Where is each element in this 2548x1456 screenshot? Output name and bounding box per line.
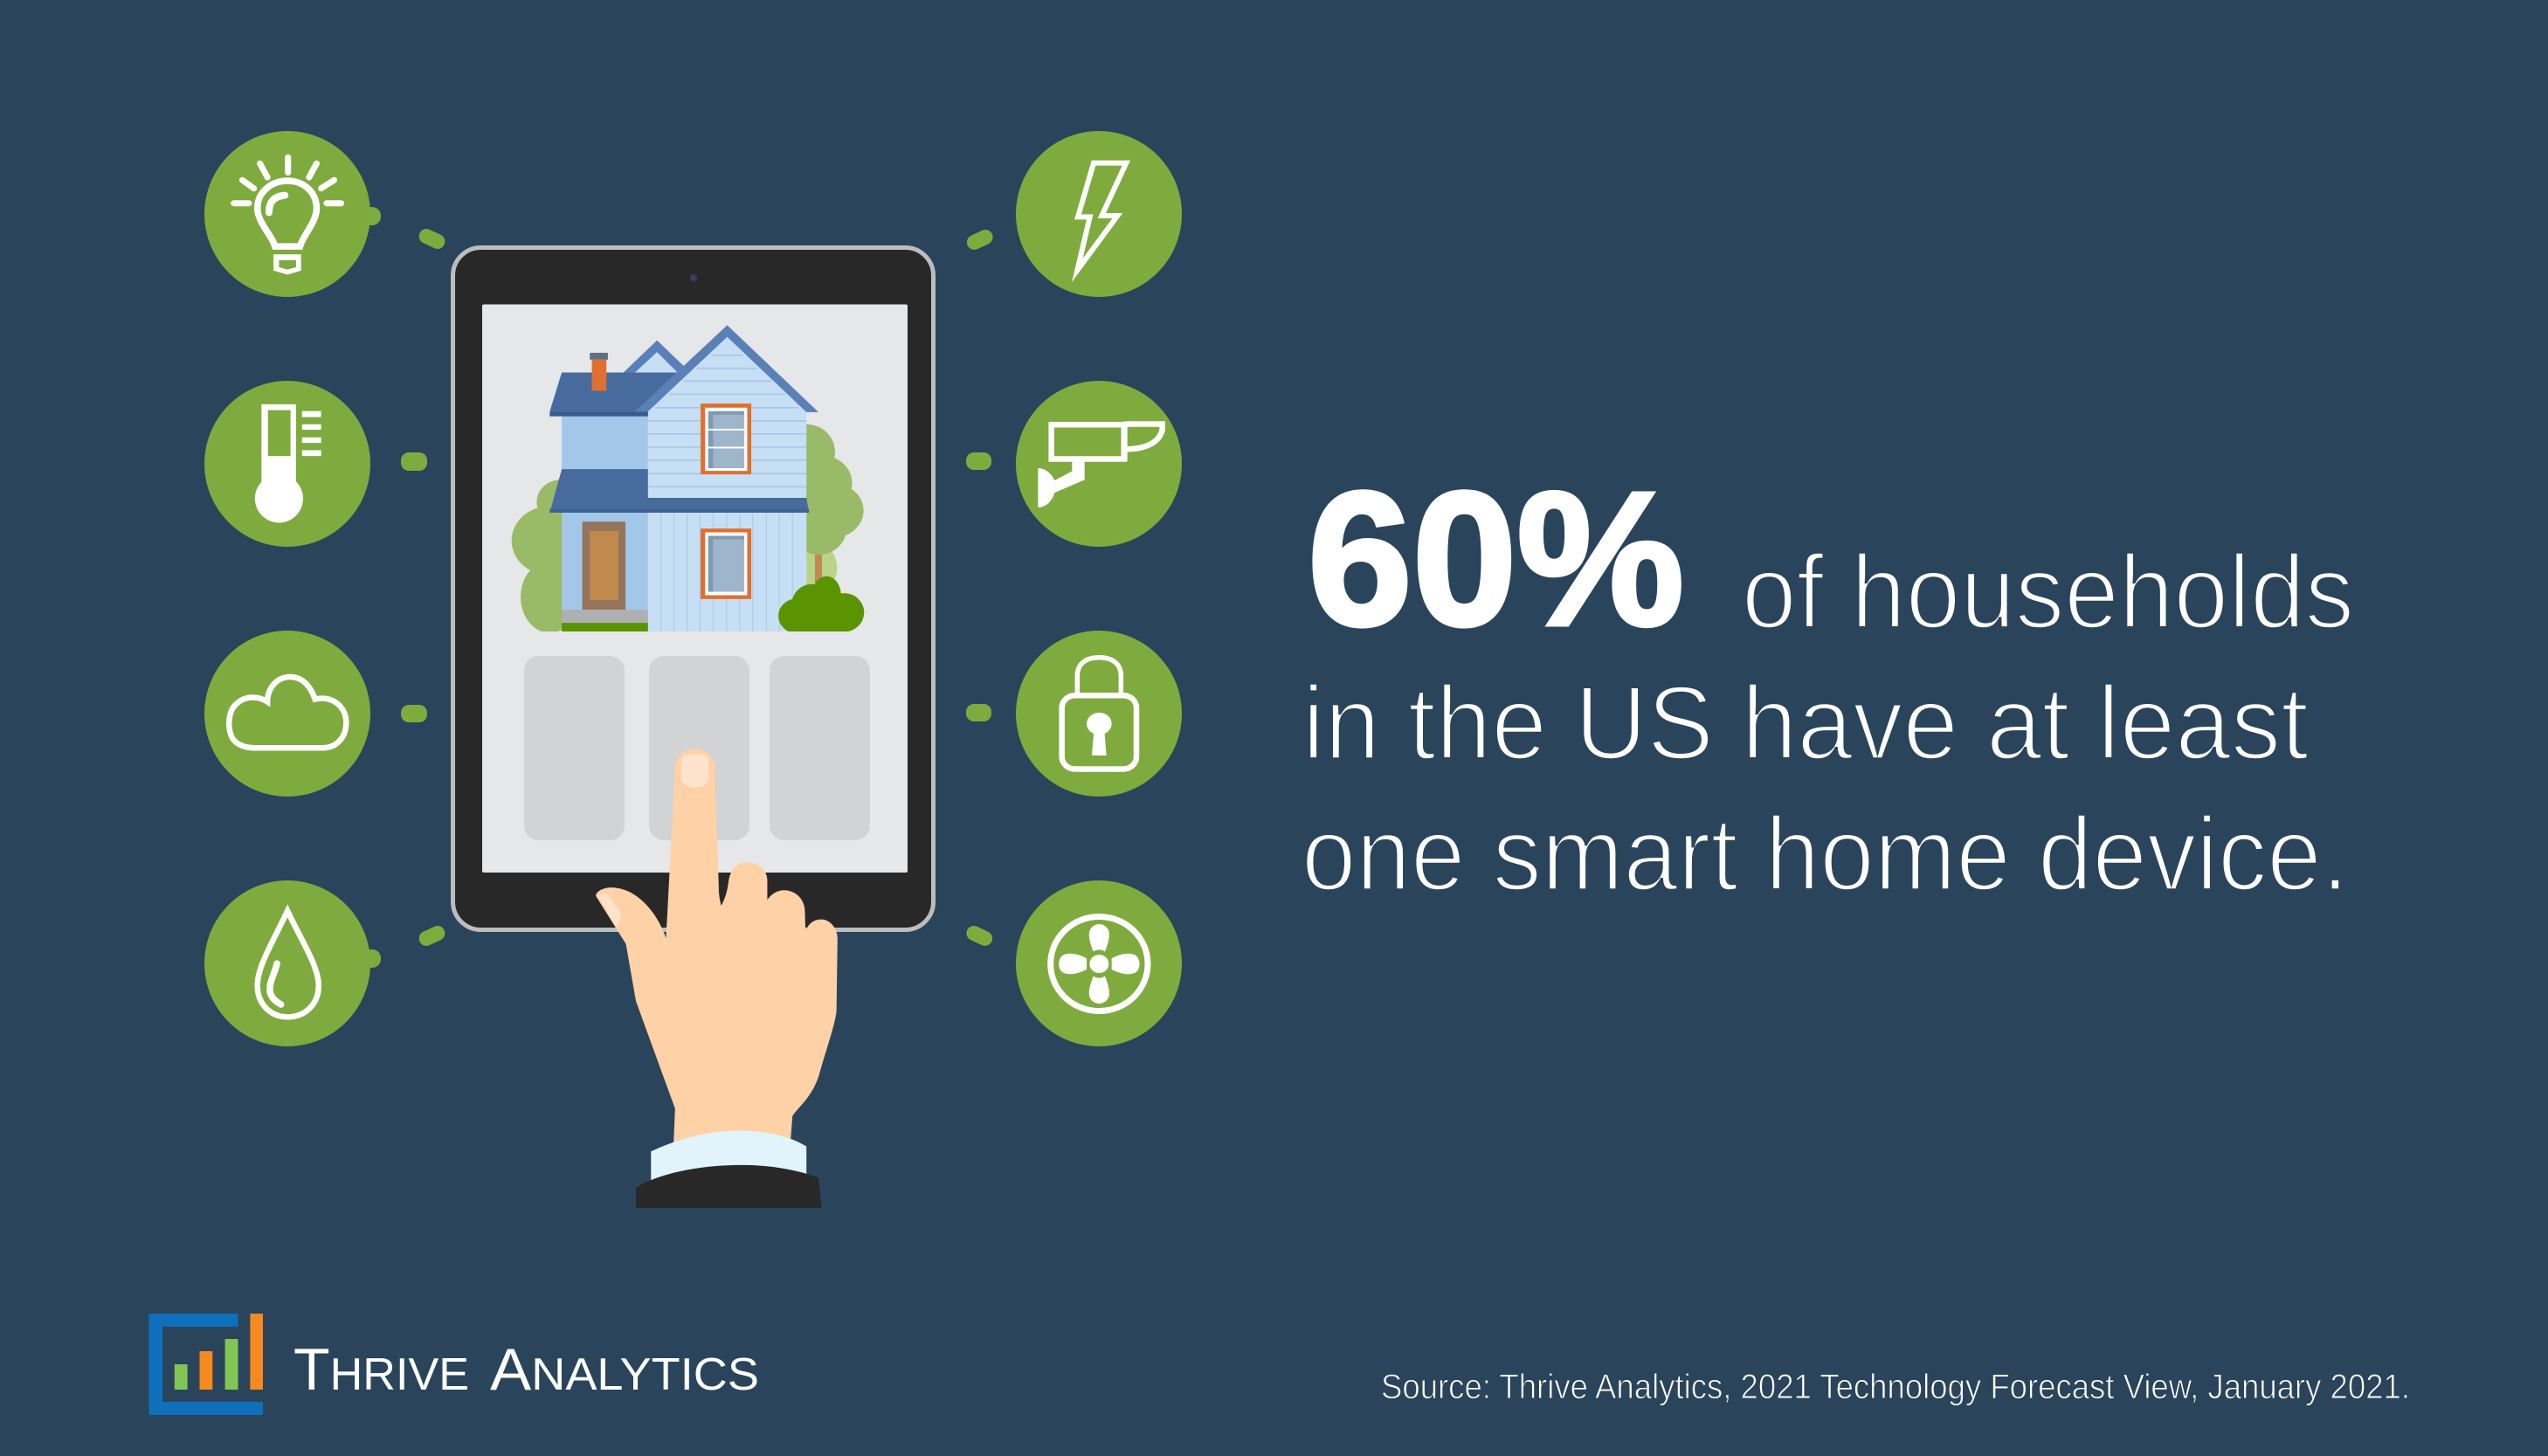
bush <box>778 576 864 633</box>
gable roof <box>635 325 818 412</box>
icon: lightning bolt <box>1016 131 1182 297</box>
porch roof <box>549 469 809 513</box>
hand <box>596 749 838 1143</box>
logo wordmark: ANALYTICS <box>490 1336 759 1403</box>
tablet camera <box>690 274 697 281</box>
thumbnail <box>598 894 621 927</box>
logo <box>148 1314 759 1415</box>
logo mark <box>148 1314 263 1415</box>
source note: Source: Thrive Analytics, 2021 Technology Forecast View, January 2021. <box>1381 1368 2410 1406</box>
icon: water drop <box>204 880 370 1046</box>
fingernail <box>681 755 708 788</box>
line 3: one smart home device. <box>1302 796 2349 913</box>
tablet body <box>452 248 933 929</box>
icon: thermometer <box>204 381 370 547</box>
icon: fan <box>1016 880 1182 1046</box>
tablet screen <box>482 304 908 873</box>
left roof <box>549 372 678 411</box>
main wall lower <box>648 513 806 631</box>
app tiles <box>524 656 870 840</box>
step and grass <box>562 610 648 631</box>
tablet <box>452 248 933 929</box>
connector dashes <box>363 207 995 968</box>
line 1: of households <box>1742 534 2354 651</box>
icon: padlock <box>1016 631 1182 797</box>
left walls <box>562 414 648 473</box>
icon: cloud <box>204 631 370 797</box>
house illustration <box>512 325 864 633</box>
line 2: in the US have at least <box>1302 665 2309 782</box>
icon: security camera <box>1016 381 1182 547</box>
main wall upper <box>648 337 806 499</box>
icon: light bulb <box>204 131 370 297</box>
logo wordmark: THRIVE <box>293 1336 469 1403</box>
small gable <box>624 341 684 372</box>
jacket sleeve <box>636 1165 821 1208</box>
shirt cuff <box>651 1131 806 1181</box>
trees <box>512 424 864 633</box>
door <box>583 521 625 610</box>
statistic text <box>1302 453 2354 913</box>
lower window <box>701 528 751 599</box>
chimney <box>590 353 608 390</box>
big number: 60% <box>1308 453 1684 666</box>
hand pressing the screen <box>596 749 838 1208</box>
upper window <box>701 404 751 474</box>
logo wordmark <box>293 1336 759 1403</box>
